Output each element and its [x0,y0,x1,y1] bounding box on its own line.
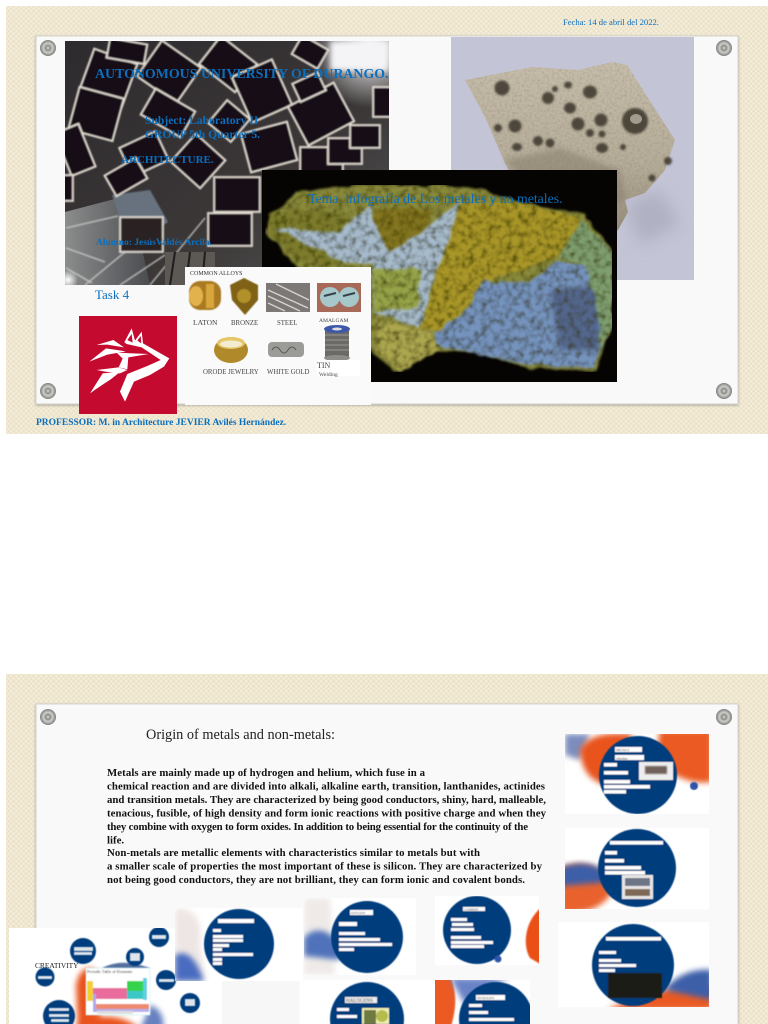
alloys panel [185,267,371,405]
alloy: tin: TIN [317,361,331,370]
alloy: white gold: WHITE GOLD [267,369,310,376]
card: carbon group: CARBON [464,908,479,912]
slide 2 paper panel [36,704,738,1024]
card: halogens: HALOGENS [346,999,373,1004]
university title: AUTONOMOUS UNIVERSITY OF DURANGO. [95,67,389,82]
card: oxygen group [304,899,404,974]
body text: chemical reaction and are divided into alkali, alkaline earth, transition, lanthanides, actinides [107,780,545,792]
alloy: amalgam: AMALGAM [319,318,349,324]
body text: not being good conductors, they are not brilliant, they can form ionic and covalent bonds. [107,874,525,886]
alloy: white gold [267,342,310,376]
body text: Metals are mainly made up of hydrogen and helium, which fuse in a [107,767,426,779]
card: transition metals [591,923,709,1007]
origin heading: Origin of metals and non-metals: [146,727,335,743]
card: nitrogen group [435,980,530,1024]
alloy: orode jewelry: ORODE JEWELRY [203,369,259,376]
grommets slide 1 [40,40,732,399]
card: metals alkaline: Alkaline [616,756,628,760]
architecture label: ARCHITECTURE. [121,154,214,166]
mineral ore photo [262,170,617,382]
subject and group: Subject: Laboratory II [145,114,259,127]
alloy: laton: LATON [193,318,218,327]
subject heading on ore: Tema infografía de Los metales y no metales. [308,191,563,206]
card: carbon group [435,896,542,965]
body text: a smaller scale of properties the most important of these is silicon. They are characterized by [107,860,543,872]
body text: life. [107,834,124,846]
slide 2 [6,674,768,1024]
body text: tenacious, fusible, of high density and form ionic reactions with positive charge and when they [107,808,547,820]
card: nitrogen group: NITROGEN [477,996,495,1000]
subject and group [145,114,260,141]
alloy: steel: STEEL [277,320,297,327]
student name: Alumno: JesúsValdés Arcila. [96,238,212,248]
body text: Non-metals are metallic elements with characteristics similar to metals but with [107,847,480,859]
periodic table: Periodic Table of Elements [87,969,133,974]
slide 1 paper panel [36,36,738,404]
body text: and transition metals. They are characterized by being good conductors, shiny, hard, malleable, [107,794,546,806]
professor credit: PROFESSOR: M. in Architecture JEVIER Avilés Hernández. [36,418,286,428]
periodic table [86,968,150,1015]
body text: they combine with oxygen to form oxides. In addition to being essential for the continuity of the [107,821,528,833]
body text [107,767,547,886]
card: metals alkaline [565,730,712,814]
creativity label: CREATIVITY [35,961,79,970]
card: oxygen group: OXYGEN [351,911,366,915]
creativity periodic table card [9,928,201,1024]
grommets slide 2 [40,709,732,725]
slide 1 background [6,6,768,434]
steel tubes photo [65,41,389,285]
slide 2 background [6,674,768,1024]
topic bubbles [36,927,200,1024]
alloy: steel [266,283,310,327]
alloy: tin [317,325,360,378]
card: alkaline earth [565,828,677,909]
task label: Task 4 [95,287,130,302]
card: noble gases [175,908,275,981]
faint paper patch right of creativity card [222,981,298,1024]
alloy: amalgam [317,283,361,324]
date: Fecha: 14 de abril del 2022. [563,17,659,27]
alloy: bronze: BRONZE [231,320,258,327]
alloy: tin: Welding [319,372,338,378]
pitted rock photo [451,37,694,280]
card: metals alkaline: METALS [616,748,629,752]
university logo [79,316,177,414]
alloys heading: COMMON ALLOYS [190,271,243,277]
alloy: laton [189,281,221,327]
card: halogens [329,981,405,1024]
alloy: orode jewelry [203,337,259,376]
subject and group: GROUP 5th Quarter 5. [145,128,260,141]
alloy: bronze [230,278,258,327]
